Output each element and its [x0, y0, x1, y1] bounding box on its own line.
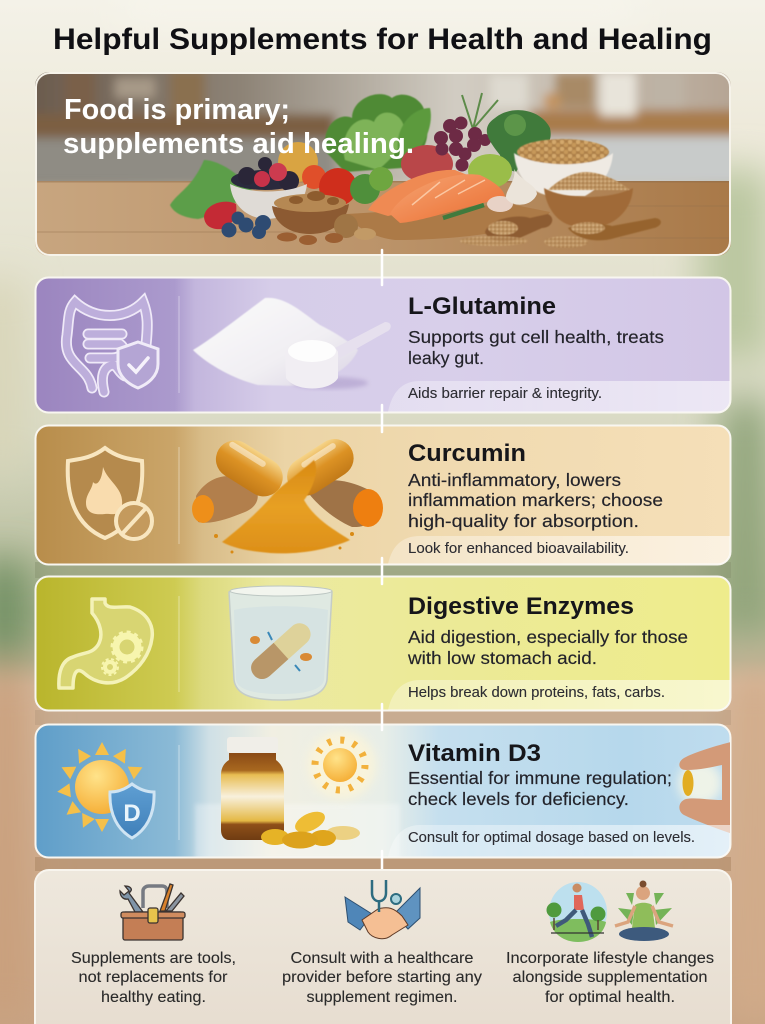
- bowl of nuts: [272, 191, 376, 245]
- text: consult a provider: Consult with a healthcare: [290, 950, 474, 967]
- turmeric roots: [192, 476, 383, 527]
- text: tools not replacements: healthy eating.: [101, 989, 206, 1006]
- text: lifestyle changes: alongside supplementation: [512, 969, 708, 986]
- note: bioavailability: [388, 536, 730, 564]
- icon: shield with flame: [68, 448, 152, 539]
- hero text: supplements aid healing.: [63, 128, 414, 160]
- text: Vitamin D3: Vitamin D3: [408, 740, 541, 767]
- small sun: [308, 731, 376, 799]
- glass of water with capsule: [229, 586, 332, 700]
- icon: sun with D shield: D: [123, 800, 141, 827]
- strawberries and blueberries: [204, 202, 271, 239]
- text: lifestyle changes: Incorporate lifestyle changes: [506, 950, 714, 967]
- softgels: [261, 808, 360, 848]
- open capsules spilling turmeric: [209, 432, 361, 554]
- blurred kitchen wall: [35, 72, 731, 181]
- text: Curcumin: Anti-inflammatory, lowers: [408, 470, 621, 490]
- hero text: [63, 94, 414, 160]
- text: tools not replacements: not replacements for: [78, 969, 228, 986]
- panel: L-Glutamine: [36, 278, 730, 412]
- icon: toolbox: [120, 884, 185, 940]
- wooden table: [25, 181, 745, 261]
- leafy greens: [170, 94, 431, 219]
- bowl of berries: [230, 157, 307, 219]
- panel: hero food banner: [35, 72, 731, 256]
- glowing connectors: [380, 250, 384, 877]
- hand holding softgel: [678, 741, 735, 835]
- note: breaks down nutrients: Helps break down proteins, fats, carbs.: [408, 685, 665, 701]
- text: consult a provider: provider before starting any: [282, 969, 482, 986]
- icon: stomach with gears: [59, 599, 152, 688]
- bowl of whole grains: [544, 172, 633, 226]
- note: bioavailability: Look for enhanced bioavailability.: [408, 541, 629, 557]
- bowl of chickpeas: [514, 139, 613, 196]
- white powder pile with scoop: [193, 298, 391, 389]
- fruits and vegetables: [278, 93, 551, 206]
- text: tools not replacements: Supplements are tools,: [71, 950, 236, 967]
- text: Digestive Enzymes: Aid digestion, especially for those: [408, 627, 688, 647]
- text: tools not replacements: [71, 950, 236, 1006]
- text: L-Glutamine: L-Glutamine: [408, 293, 556, 320]
- text: L-Glutamine: leaky gut.: [408, 348, 484, 368]
- text: lifestyle changes: for optimal health.: [545, 989, 675, 1006]
- panel: Vitamin D3: [36, 724, 735, 859]
- note: breaks down nutrients: [388, 680, 730, 710]
- cutting board: [347, 204, 550, 240]
- text: Vitamin D3: check levels for deficiency.: [408, 789, 629, 809]
- panel: Digestive Enzymes: [36, 576, 730, 710]
- note: dosage: [388, 825, 730, 857]
- panel: key takeaways: [35, 870, 731, 1024]
- icon: intestine with shield: [66, 302, 158, 392]
- text: Curcumin: high-quality for absorption.: [408, 511, 639, 531]
- panel: Curcumin: [36, 426, 730, 564]
- icon: runner in nature: [546, 882, 607, 942]
- text: consult a provider: supplement regimen.: [306, 989, 458, 1006]
- text: lifestyle changes: [506, 950, 714, 1006]
- text: consult a provider: [282, 950, 482, 1006]
- icon: sun with D shield: [57, 742, 154, 838]
- text: Digestive Enzymes: with low stomach acid.: [407, 648, 597, 668]
- salmon fillets: [368, 170, 513, 223]
- text: Digestive Enzymes: Digestive Enzymes: [408, 593, 634, 620]
- text: Curcumin: Curcumin: [408, 440, 526, 467]
- text: Digestive Enzymes: [407, 593, 688, 668]
- text: Vitamin D3: [408, 740, 672, 809]
- icon: handshake and stethoscope: [345, 880, 420, 939]
- hero text: Food is primary;: [64, 94, 290, 126]
- wooden scoops and spilled grains: [460, 214, 661, 248]
- icon: yoga figure: [615, 880, 673, 941]
- text: Curcumin: [408, 440, 663, 531]
- title: Helpful Supplements for Health and Healing: [53, 23, 712, 56]
- text: L-Glutamine: [408, 293, 664, 368]
- text: Curcumin: inflammation markers; choose: [408, 490, 663, 510]
- text: Vitamin D3: Essential for immune regulation;: [408, 768, 672, 788]
- note: barrier repair: Aids barrier repair & integrity.: [408, 386, 602, 402]
- text: L-Glutamine: Supports gut cell health, treats: [408, 327, 664, 347]
- hero frame: [36, 73, 730, 255]
- garlic: [506, 169, 537, 205]
- note: dosage: Consult for optimal dosage based on levels.: [408, 830, 695, 846]
- note: barrier repair: [388, 381, 730, 412]
- amber vitamin bottle: [221, 737, 284, 840]
